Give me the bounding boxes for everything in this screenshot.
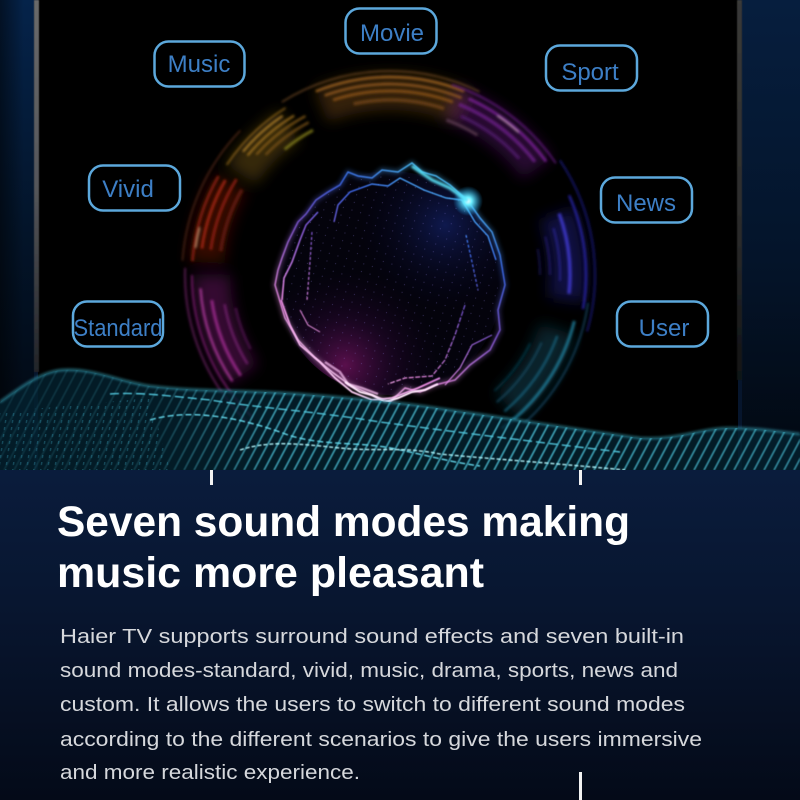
sound ring soft glows	[140, 25, 640, 525]
wave crest line	[0, 370, 800, 438]
button: Music	[154, 42, 244, 86]
button: Movie	[346, 8, 436, 54]
sphere inner filaments	[281, 178, 496, 400]
button: Standard	[73, 302, 163, 346]
sphere glow	[275, 163, 505, 402]
button: Vivid	[89, 166, 180, 210]
body paragraph: sound modes-standard, vivid, music, drama, sports, news and	[60, 659, 678, 682]
heading: Seven sound modes making	[57, 498, 630, 546]
body paragraph	[60, 625, 702, 784]
wave dim dot grid	[0, 398, 170, 470]
body paragraph: Haier TV supports surround sound effects and seven built-in	[60, 625, 684, 648]
sound sphere	[275, 163, 505, 402]
button: User	[617, 302, 708, 346]
wave ridge highlights	[110, 393, 625, 470]
sound wave surface	[0, 360, 800, 470]
ring: orange top	[109, 0, 671, 556]
button: Sport: Sport	[561, 59, 619, 86]
ring: blue right	[105, 0, 675, 560]
ring: magenta lower-left	[100, 0, 680, 565]
sphere flare	[412, 166, 490, 216]
sphere outer filament	[275, 163, 505, 402]
ring: purple upper-right	[123, 8, 657, 542]
lower navy background	[0, 470, 800, 800]
button: Vivid: Vivid	[102, 176, 154, 203]
button: User: User	[639, 315, 689, 342]
button: Standard: Standard	[74, 315, 162, 342]
button: Sport	[546, 46, 637, 90]
sound rings	[100, 0, 680, 565]
heading: music more pleasant	[57, 549, 484, 597]
tv frame right	[737, 0, 742, 380]
sphere bright base	[345, 382, 438, 402]
button: News: News	[616, 190, 676, 217]
wave streaks	[0, 360, 800, 470]
ring: teal lower-right	[160, 45, 620, 505]
ring: amber upper-left	[117, 2, 663, 548]
button: News	[601, 178, 692, 222]
body paragraph: custom. It allows the users to switch to different sound modes	[60, 693, 685, 716]
tv screen	[38, 0, 738, 470]
tick marks	[210, 470, 582, 800]
tv frame left	[34, 0, 39, 372]
button: Movie: Movie	[360, 20, 424, 47]
body paragraph: and more realistic experience.	[60, 761, 360, 784]
button: Music: Music	[168, 51, 230, 78]
left side backdrop	[0, 0, 34, 470]
ring: red left	[168, 53, 612, 497]
sound mode buttons	[73, 8, 708, 346]
body paragraph: according to the different scenarios to give the users immersive	[60, 728, 702, 751]
right side backdrop	[742, 0, 800, 470]
wave base glow	[0, 370, 800, 470]
sphere body	[278, 171, 502, 395]
heading	[57, 498, 630, 597]
